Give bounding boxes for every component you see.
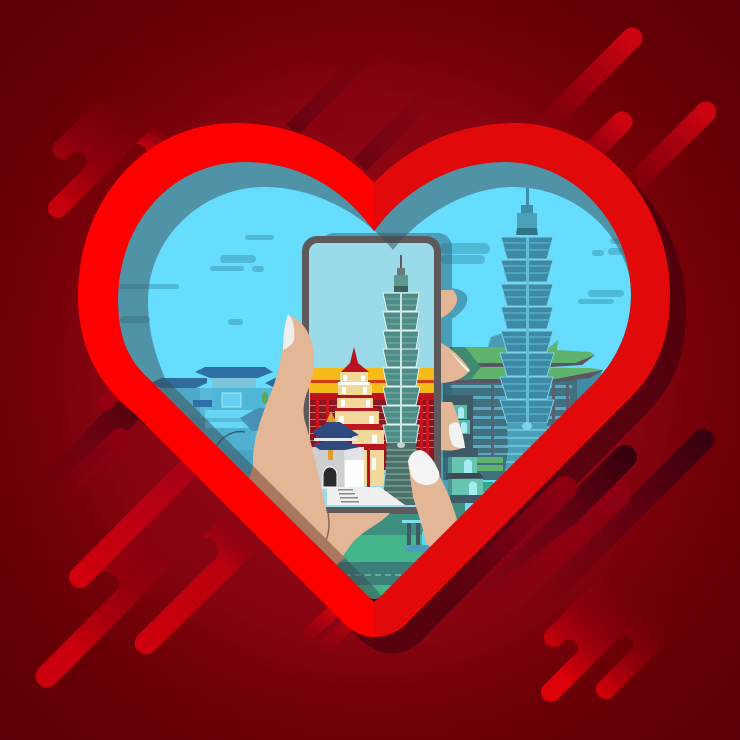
background streak: top left shard — [136, 125, 170, 155]
ring finger nail — [449, 422, 465, 448]
front finger nail — [408, 450, 439, 485]
phone body — [302, 236, 441, 514]
screen: Taipei 101 — [382, 255, 420, 505]
background streaks: top right — [540, 38, 706, 193]
background streak: bottom right upper pair — [541, 557, 665, 702]
background streaks: below heart tip — [302, 610, 350, 652]
background streak: bottom right lower — [596, 611, 672, 699]
background streak: bottom left lower — [135, 512, 262, 654]
left temple scene — [152, 367, 276, 494]
heart window scene — [118, 162, 631, 599]
background streak: bottom left upper pair — [36, 452, 243, 687]
phone shadow — [320, 233, 467, 513]
front finger — [408, 451, 457, 550]
heart inner shadow overlay — [118, 162, 630, 599]
large Taipei 101 tower — [500, 188, 554, 490]
thumbnail — [283, 314, 294, 350]
background streaks: dark right — [445, 440, 703, 640]
red heart frame — [78, 123, 670, 637]
screen: yellow temple — [310, 368, 434, 470]
screen: memorial hall — [312, 411, 405, 505]
shadow band on the wrist — [248, 466, 345, 566]
middle finger nail — [450, 351, 470, 372]
ring finger — [441, 402, 465, 451]
ground and lower gardens — [336, 503, 465, 599]
left half of heart — [78, 123, 374, 637]
background streak: top left pair — [48, 48, 191, 218]
hand — [253, 290, 470, 556]
right half of heart — [374, 123, 670, 637]
clouds — [119, 235, 628, 325]
heart drop shadow — [94, 139, 686, 654]
index finger top — [441, 290, 457, 318]
right temple scene — [443, 333, 603, 480]
background streaks: left dark band — [40, 390, 125, 500]
palm and thumb side — [253, 315, 390, 556]
sky — [118, 162, 631, 599]
wrist crease — [326, 513, 330, 540]
small mint pagoda — [443, 395, 493, 503]
finger middle — [441, 343, 470, 383]
phone screen — [309, 243, 434, 507]
background streaks: top centre — [292, 42, 440, 165]
screen: red pagoda — [331, 347, 386, 488]
phone — [302, 236, 441, 514]
